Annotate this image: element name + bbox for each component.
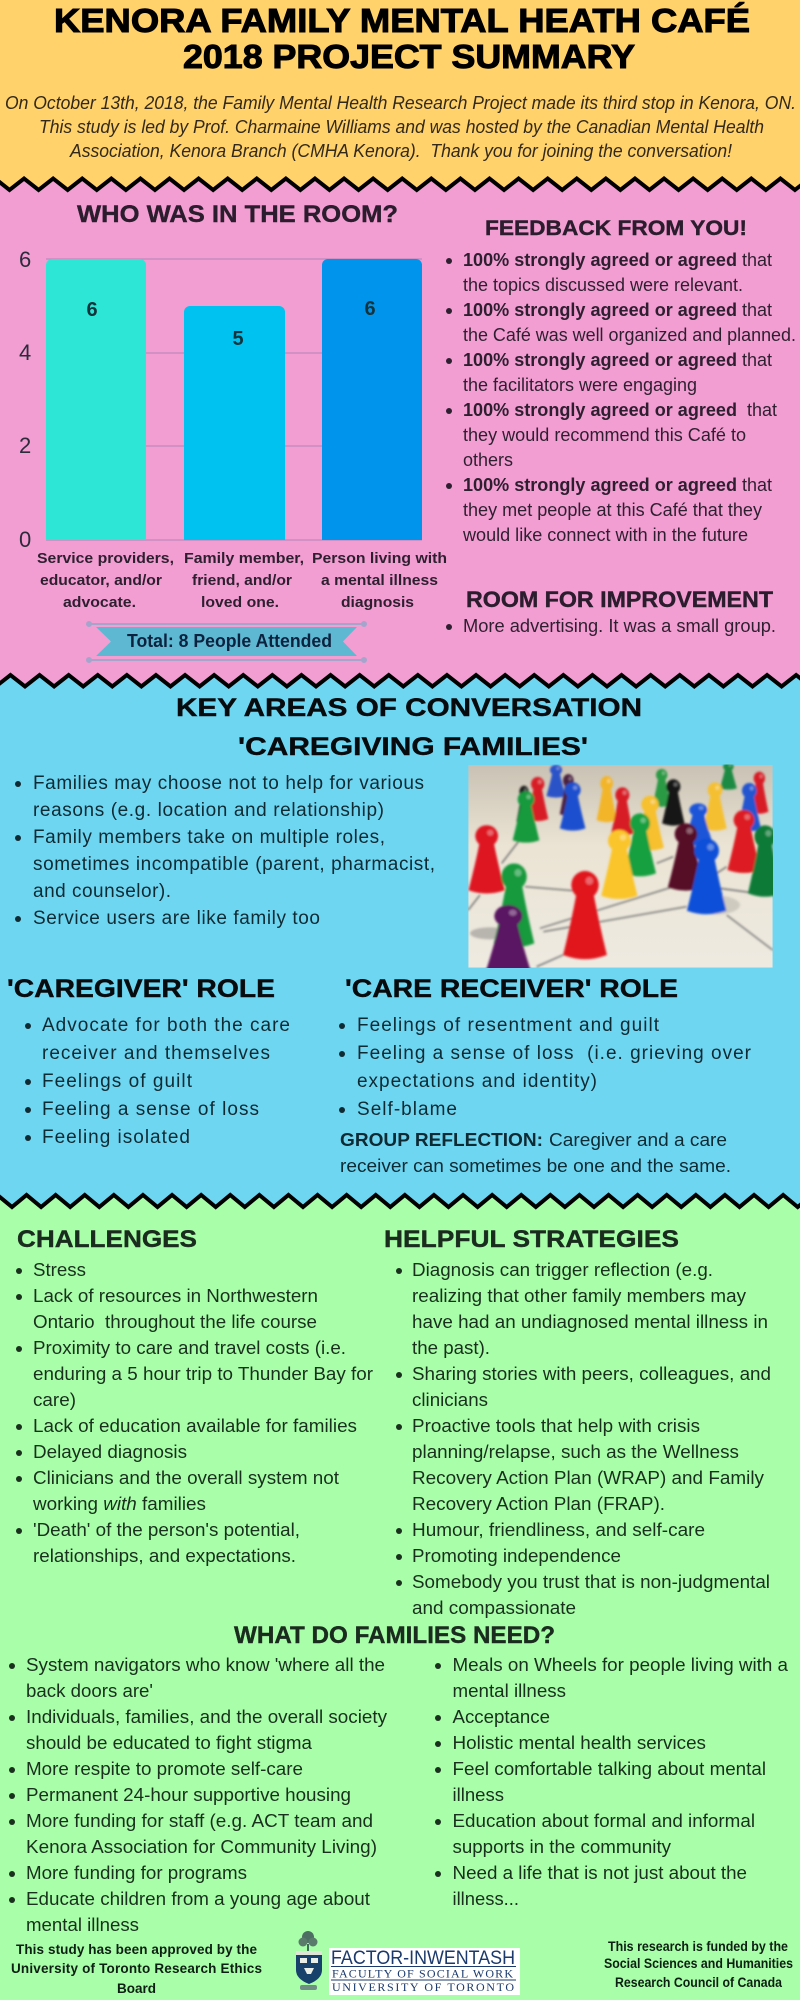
- list: care receiver role: [339, 1015, 752, 1120]
- list: challenges: Ontario throughout the life course: [33, 1312, 317, 1332]
- list: caregiving families: and counselor).: [33, 881, 171, 902]
- list: feedback items: 100% strongly agreed or agreed: [463, 400, 737, 420]
- list: family needs left column: mental illness: [26, 1915, 139, 1935]
- list: helpful strategies: Somebody you trust that is non-judgmental: [412, 1572, 770, 1592]
- footer: funding note: This research is funded by the: [608, 1939, 788, 1954]
- heading: key areas of conversation: KEY AREAS OF CONVERSATION: [176, 694, 642, 722]
- list: caregiving families: [15, 773, 435, 929]
- list: helpful strategies: Proactive tools that help with crisis: [412, 1416, 700, 1436]
- list: caregiver role: Advocate for both the care: [42, 1015, 290, 1036]
- list: family needs right column: [435, 1655, 789, 1909]
- bar chart: attendees: advocate.: [63, 595, 136, 611]
- heading: care receiver role: 'CARE RECEIVER' ROLE: [345, 975, 678, 1003]
- intro text: Association, Kenora Branch (CMHA Kenora). Thank you for joining the conversation!: [69, 141, 732, 161]
- list: feedback items: the facilitators were engaging: [463, 375, 697, 395]
- list: family needs left column: Permanent 24-hour supportive housing: [26, 1785, 351, 1805]
- list: caregiver role: Feeling a sense of loss: [42, 1099, 259, 1120]
- list: family needs right column: Acceptance: [452, 1707, 550, 1727]
- list: helpful strategies: Promoting independence: [412, 1546, 621, 1566]
- heading: room for improvement: ROOM FOR IMPROVEMENT: [466, 587, 774, 612]
- list: care receiver role: Feelings of resentment and guilt: [357, 1015, 660, 1036]
- list: family needs left column: Individuals, families, and the overall society: [26, 1707, 387, 1727]
- bar chart: attendees: 6: [86, 299, 98, 321]
- list: family needs right column: illness: [452, 1785, 504, 1805]
- list: feedback items: 100% strongly agreed or agreed: [463, 475, 737, 495]
- list: family needs left column: System navigators who know 'where all the: [26, 1655, 385, 1675]
- list: feedback items: that: [742, 475, 772, 495]
- heading: caregiving families: 'CAREGIVING FAMILIES': [238, 733, 588, 761]
- list: family needs left column: should be educated to fight stigma: [26, 1733, 313, 1753]
- list: feedback items: 100% strongly agreed or agreed: [463, 300, 737, 320]
- list: challenges: 'Death' of the person's potential,: [33, 1520, 300, 1540]
- list: helpful strategies: Humour, friendliness, and self-care: [412, 1520, 705, 1540]
- list: family needs right column: mental illness: [452, 1681, 566, 1701]
- bar chart: attendees: friend, and/or: [192, 573, 292, 589]
- list: caregiver role: Feelings of guilt: [42, 1071, 193, 1092]
- list: challenges: relationships, and expectations.: [33, 1546, 296, 1566]
- list: caregiving families: Service users are like family too: [33, 908, 320, 929]
- list: feedback items: others: [463, 450, 513, 470]
- footer: ethics approval note: This study has been approved by the: [16, 1942, 257, 1957]
- list: family needs right column: supports in the community: [452, 1837, 671, 1857]
- intro text: [5, 93, 796, 161]
- text: group reflection: GROUP REFLECTION:: [340, 1130, 543, 1150]
- list: helpful strategies: the past).: [412, 1338, 490, 1358]
- list: caregiving families: Family members take on multiple roles,: [33, 827, 385, 848]
- list: helpful strategies: [396, 1260, 771, 1618]
- bar chart: attendees: a mental illness: [321, 573, 438, 589]
- list: caregiver role: Feeling isolated: [42, 1127, 190, 1148]
- footer: ethics approval note: Board: [117, 1981, 156, 1996]
- heading: challenges: CHALLENGES: [17, 1226, 197, 1253]
- list: family needs left column: back doors are': [26, 1681, 153, 1701]
- bar chart: attendees: 4: [19, 340, 31, 365]
- list: feedback items: they met people at this Café that they: [463, 500, 762, 520]
- list: challenges: [16, 1260, 373, 1566]
- list: feedback items: that: [747, 400, 777, 420]
- list: feedback items: would like connect with in the future: [462, 525, 748, 545]
- list: feedback items: that: [742, 250, 772, 270]
- list: feedback items: 100% strongly agreed or agreed: [463, 350, 737, 370]
- text: group reflection: [340, 1130, 731, 1176]
- list: feedback items: they would recommend this Café to: [463, 425, 746, 445]
- list: caregiving families: reasons (e.g. location and relationship): [33, 800, 384, 821]
- list: feedback items: that: [742, 350, 772, 370]
- list: family needs right column: Need a life that is not just about the: [452, 1863, 747, 1883]
- logo: Factor-Inwentash Faculty of Social Work: UNIVERSITY OF TORONTO: [332, 1980, 514, 1994]
- list: challenges: Lack of education available for families: [33, 1416, 357, 1436]
- panel: header background: [0, 0, 800, 400]
- list: feedback items: 100% strongly agreed or agreed: [463, 250, 737, 270]
- list: helpful strategies: Recovery Action Plan (WRAP) and Family: [412, 1468, 764, 1488]
- list: helpful strategies: clinicians: [412, 1390, 488, 1410]
- bar chart: attendees: 6: [364, 298, 376, 320]
- bar chart: attendees: loved one.: [201, 595, 279, 611]
- panel: blue section background with zigzag edge: [0, 675, 800, 2000]
- list: helpful strategies: have had an undiagnosed mental illness in: [412, 1312, 768, 1332]
- list: challenges: care): [33, 1390, 76, 1410]
- list: family needs left column: More funding for staff (e.g. ACT team and: [26, 1811, 373, 1831]
- list: care receiver role: Self-blame: [357, 1099, 457, 1120]
- list: challenges: working with families: [32, 1494, 206, 1514]
- image: network of coloured game pawns: [468, 762, 782, 974]
- list: caregiving families: sometimes incompatible (parent, pharmacist,: [33, 854, 435, 875]
- list: feedback items: that: [742, 300, 772, 320]
- list: family needs left column: [9, 1655, 387, 1935]
- list: care receiver role: expectations and identity): [357, 1071, 597, 1092]
- footer: funding note: Research Council of Canada: [615, 1975, 782, 1990]
- list: helpful strategies: planning/relapse, such as the Wellness: [412, 1442, 739, 1462]
- bar chart: attendees: [19, 247, 447, 611]
- bar chart: attendees: Person living with: [312, 551, 447, 567]
- footer: funding note: [604, 1939, 793, 1990]
- list: family needs right column: Meals on Wheels for people living with a: [452, 1655, 789, 1675]
- list: challenges: Proximity to care and travel costs (i.e.: [33, 1338, 346, 1358]
- intro text: On October 13th, 2018, the Family Mental Health Research Project made its third stop in Kenora, ON.: [5, 93, 796, 113]
- list: family needs left column: More funding for programs: [26, 1863, 247, 1883]
- bar chart: attendees: diagnosis: [341, 595, 414, 611]
- bar chart: attendees: Service providers,: [37, 551, 174, 567]
- heading: who was in the room: WHO WAS IN THE ROOM?: [77, 201, 398, 228]
- list: challenges: Delayed diagnosis: [33, 1442, 187, 1462]
- list: helpful strategies: Sharing stories with peers, colleagues, and: [412, 1364, 771, 1384]
- bar chart: attendees: 6: [19, 247, 31, 272]
- heading: caregiver role: 'CAREGIVER' ROLE: [7, 975, 275, 1003]
- text: group reflection: Caregiver and a care: [549, 1130, 727, 1150]
- footer: ethics approval note: [11, 1942, 262, 1996]
- list: family needs left column: Kenora Association for Community Living): [26, 1837, 377, 1857]
- logo: Factor-Inwentash Faculty of Social Work: FACULTY OF SOCIAL WORK: [332, 1966, 513, 1980]
- bar chart: attendees: educator, and/or: [40, 573, 162, 589]
- logo: Factor-Inwentash Faculty of Social Work: [329, 1948, 520, 1995]
- footer: ethics approval note: University of Toronto Research Ethics: [11, 1961, 262, 1976]
- list: feedback items: the topics discussed were relevant.: [463, 275, 743, 295]
- list: helpful strategies: Recovery Action Plan (FRAP).: [412, 1494, 665, 1514]
- list: family needs left column: More respite to promote self-care: [26, 1759, 303, 1779]
- logo: Factor-Inwentash Faculty of Social Work: FACTOR-INWENTASH: [331, 1948, 515, 1969]
- title: 2018 PROJECT SUMMARY: [183, 38, 635, 75]
- list: challenges: Clinicians and the overall system not: [33, 1468, 339, 1488]
- panel: green section background with zigzag edge: [0, 1195, 800, 2000]
- banner: total attendance: [87, 622, 366, 662]
- list: caregiving families: Families may choose not to help for various: [33, 773, 424, 794]
- list: helpful strategies: realizing that other family members may: [412, 1286, 746, 1306]
- list: care receiver role: Feeling a sense of loss (i.e. grieving over: [357, 1043, 752, 1064]
- heading: what do families need: WHAT DO FAMILIES NEED?: [234, 1622, 555, 1649]
- list: feedback items: [446, 250, 796, 545]
- list: caregiver role: receiver and themselves: [42, 1043, 270, 1064]
- heading: helpful strategies: HELPFUL STRATEGIES: [384, 1226, 679, 1253]
- list: family needs right column: Education about formal and informal: [452, 1811, 755, 1831]
- heading: feedback: FEEDBACK FROM YOU!: [485, 216, 747, 240]
- list: family needs left column: Educate children from a young age about: [26, 1889, 370, 1909]
- list: helpful strategies: and compassionate: [412, 1598, 576, 1618]
- text: group reflection: receiver can sometimes be one and the same.: [340, 1156, 731, 1176]
- list: family needs right column: illness...: [452, 1889, 519, 1909]
- banner: total attendance: Total: 8 People Attended: [127, 631, 332, 651]
- bar chart: attendees: 2: [19, 433, 31, 458]
- bar chart: attendees: 5: [232, 328, 244, 350]
- list: feedback items: the Café was well organized and planned.: [463, 325, 796, 345]
- list: helpful strategies: Diagnosis can trigger reflection (e.g.: [412, 1260, 713, 1280]
- list: challenges: enduring a 5 hour trip to Thunder Bay for: [33, 1364, 373, 1384]
- list: family needs right column: Holistic mental health services: [452, 1733, 706, 1753]
- bar chart: attendees: Family member,: [184, 551, 304, 567]
- title: KENORA FAMILY MENTAL HEATH CAFÉ: [54, 2, 750, 39]
- list: challenges: Stress: [33, 1260, 86, 1280]
- list: caregiver role: [25, 1015, 290, 1148]
- list: challenges: Lack of resources in Northwestern: [33, 1286, 318, 1306]
- intro text: This study is led by Prof. Charmaine Williams and was hosted by the Canadian Mental Health: [39, 117, 764, 137]
- icon: University of Toronto crest: [296, 1931, 322, 1990]
- list: family needs right column: Feel comfortable talking about mental: [452, 1759, 766, 1779]
- title: [54, 2, 750, 75]
- bar chart: attendees: 0: [19, 527, 31, 552]
- text: improvement item: More advertising. It was a small group.: [463, 616, 776, 636]
